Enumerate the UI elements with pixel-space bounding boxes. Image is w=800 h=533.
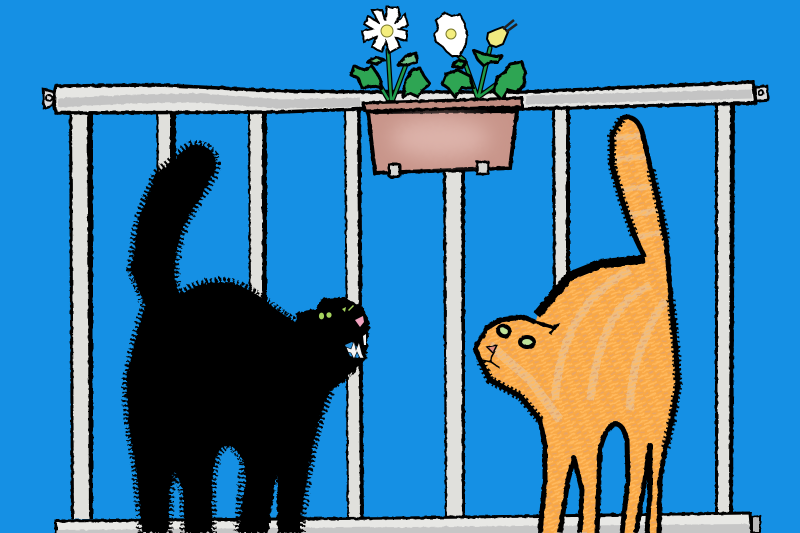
daisy centre right [446,29,456,39]
daisy left [362,7,408,53]
orange cat outline [475,117,678,533]
black cat nose [355,316,364,327]
flower pot [363,98,522,177]
daisy centre left [381,25,393,37]
orange cat tan stripes [490,136,665,420]
black cat spiky fur [126,144,330,533]
orange cat nose [487,345,497,353]
flower plants [351,7,525,100]
bottom rail [56,513,760,533]
daisy right [434,13,467,56]
balcony railing bars [69,102,735,520]
orange cat mouth [482,353,500,368]
orange cat fur fill [475,117,678,533]
orange cat [475,117,678,533]
stems [372,48,505,99]
leaves [351,50,525,100]
rail end cap right [755,86,768,101]
green stems [372,48,505,99]
rail end cap left [43,89,54,108]
black cat [126,144,370,533]
flower bud [487,20,517,47]
black cat body [126,144,370,533]
black cat eyes [319,305,354,319]
orange cat spiky outline [480,118,678,450]
orange cat ear [522,318,556,334]
orange cat back fringe [537,259,645,315]
orange cat fur hatching [475,117,678,533]
top rail [43,82,768,113]
orange cat eyes [496,324,534,347]
black cat teeth [345,334,366,359]
